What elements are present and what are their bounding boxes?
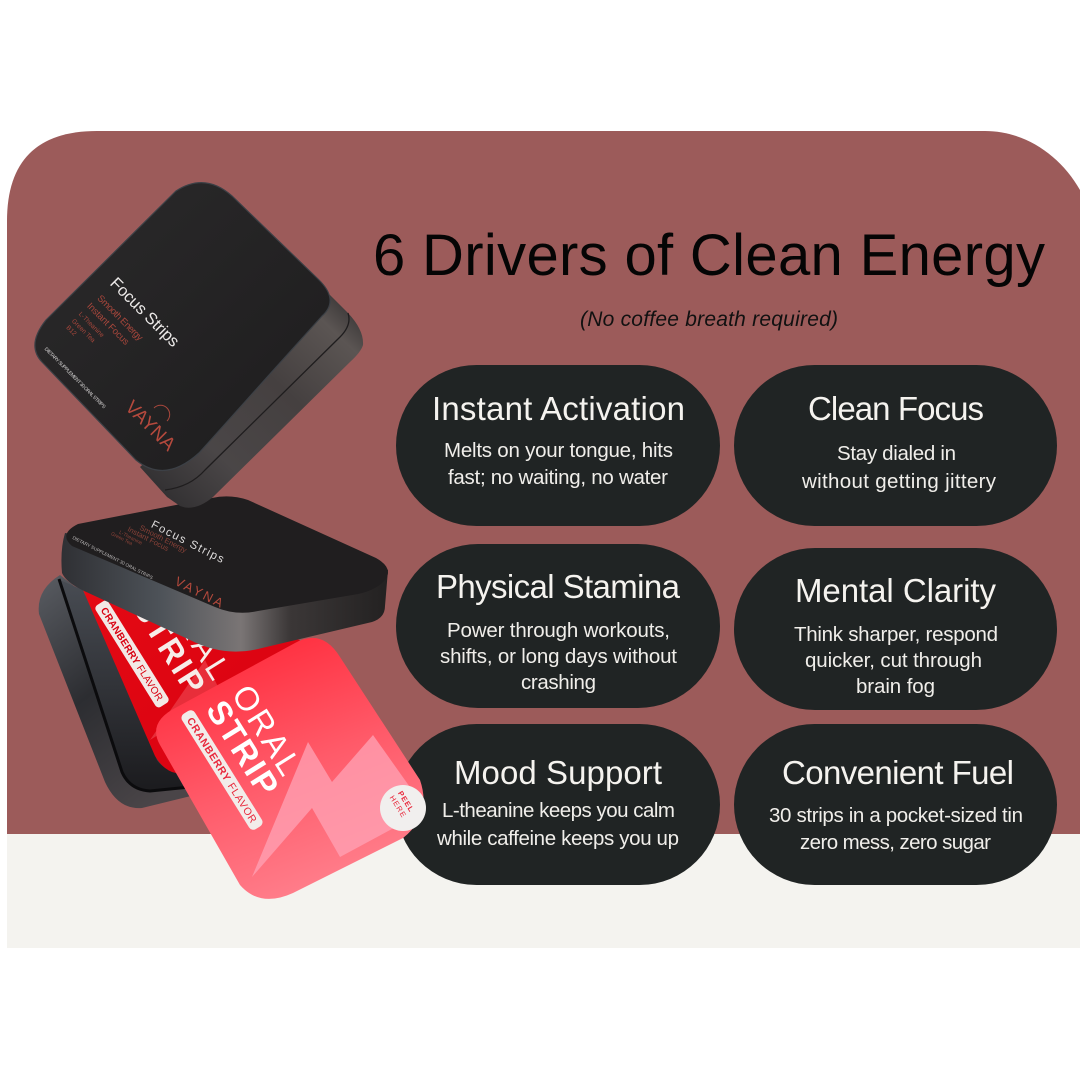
peel here tab: PEEL <box>396 789 416 814</box>
card: Instant Activation: fast; no waiting, no water <box>448 466 668 489</box>
lid label text: VAYNA <box>172 574 226 611</box>
card: Mood Support: L-theanine keeps you calm <box>442 799 675 822</box>
peel here tab: HERE <box>388 794 409 820</box>
card: Physical Stamina: Power through workouts, <box>447 619 670 642</box>
product tin lid with label <box>61 496 388 652</box>
strip wordmark: STRIP <box>199 694 286 802</box>
lightning bolt <box>252 735 412 877</box>
card: Convenient Fuel: Convenient Fuel <box>782 754 1014 791</box>
card: Mental Clarity: quicker, cut through <box>805 649 982 672</box>
tin label text: Smooth Energy <box>95 293 145 344</box>
lid label text: DIETARY SUPPLEMENT 30 ORAL STRIPS <box>72 535 154 580</box>
tin label text: DIETARY SUPPLEMENT 30 ORAL STRIPS <box>43 346 107 411</box>
card: Physical Stamina: crashing <box>521 671 596 694</box>
card: Physical Stamina: Physical Stamina <box>436 568 681 605</box>
card: Mood Support <box>396 724 720 885</box>
card: Instant Activation <box>396 365 720 526</box>
card: Mental Clarity: brain fog <box>856 675 935 698</box>
cranberry flavor label: CRANBERRY FLAVOR <box>184 715 259 826</box>
inner red pack: CRANBERRY FLAVOR <box>98 606 164 703</box>
cream base band <box>7 834 1080 948</box>
lid label text: Green Tea <box>110 531 133 547</box>
card: Physical Stamina: shifts, or long days without <box>440 645 677 668</box>
card: Instant Activation: Instant Activation <box>432 390 685 427</box>
tin label text: L-Theanine <box>77 311 105 339</box>
tin label text: Instant Focus <box>84 301 131 348</box>
peel here tab <box>380 785 426 831</box>
card: Convenient Fuel <box>734 724 1057 885</box>
card: Mental Clarity: Think sharper, respond <box>794 623 998 646</box>
card: Physical Stamina <box>396 544 720 708</box>
inner red pack: STRIP <box>126 592 212 700</box>
lid label text: L-Theanine <box>118 530 143 547</box>
product tin, closed <box>35 183 363 508</box>
card: Mental Clarity: Mental Clarity <box>795 572 996 609</box>
tin label text <box>43 274 183 456</box>
card: Mood Support: while caffeine keeps you up <box>436 827 679 850</box>
inner red pack <box>83 583 300 778</box>
lid label text <box>72 519 226 611</box>
oral wordmark: ORAL <box>225 678 309 782</box>
inner red pack: ORAL <box>155 583 238 686</box>
title: 6 Drivers of Clean Energy <box>373 223 1045 288</box>
front oral strip packet <box>156 638 426 899</box>
card: Mental Clarity <box>734 548 1057 710</box>
tin label text: VAYNA <box>121 397 179 456</box>
card: Clean Focus: without getting jittery <box>801 470 997 493</box>
card: Mood Support: Mood Support <box>454 754 662 791</box>
tin label text: B12 <box>64 324 78 338</box>
background panel: rose with rounded top corners <box>7 131 1080 834</box>
card: Clean Focus: Clean Focus <box>808 390 984 427</box>
card: Instant Activation: Melts on your tongue, hits <box>444 439 673 462</box>
product tin base, open <box>39 575 300 808</box>
lid label text: Focus Strips <box>149 519 226 566</box>
card: Clean Focus: Stay dialed in <box>837 442 956 465</box>
card: Convenient Fuel: 30 strips in a pocket-sized tin <box>769 804 1023 827</box>
card: Convenient Fuel: zero mess, zero sugar <box>800 831 991 854</box>
card: Clean Focus <box>734 365 1057 526</box>
tin label text: Green Tea <box>70 318 96 344</box>
subtitle: (No coffee breath required) <box>580 308 838 331</box>
lid label text: Smooth Energy <box>138 523 188 555</box>
tin label text: Focus Strips <box>106 274 183 351</box>
lid label text: Instant Focus <box>126 525 170 553</box>
